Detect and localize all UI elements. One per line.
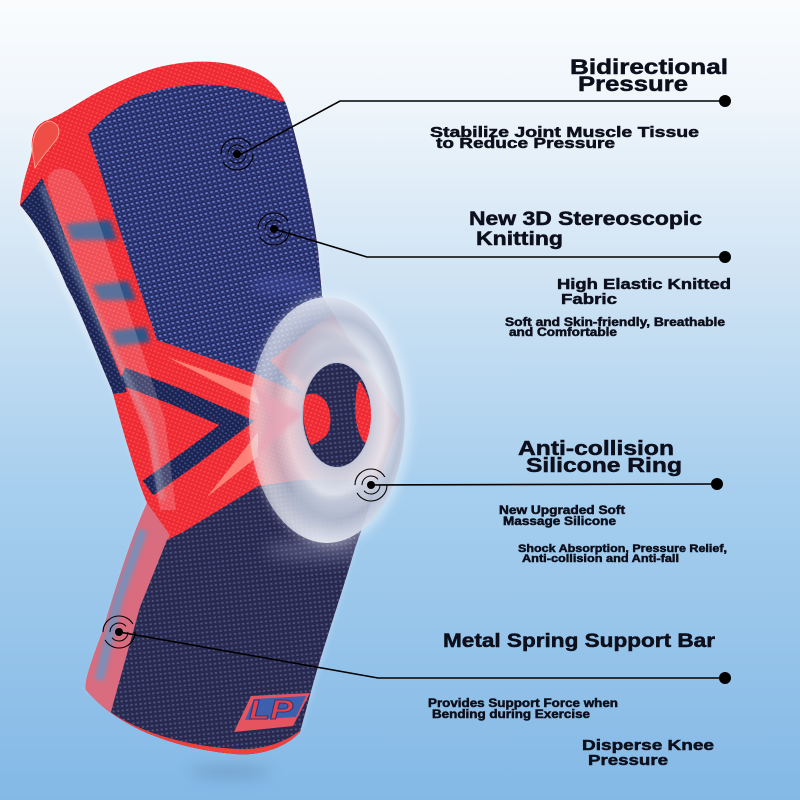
navy chevron in red zone bbox=[122, 376, 237, 488]
heading: Bidirectional Pressure bbox=[570, 55, 728, 96]
knit visible through the hole bbox=[302, 362, 372, 468]
callout line: 3D knitting bbox=[258, 213, 731, 263]
heading: 3D knitting: Knitting bbox=[476, 229, 563, 250]
lower navy knit panel bbox=[111, 480, 378, 754]
red side lobe bbox=[33, 121, 59, 168]
sleeve glow bbox=[20, 62, 355, 732]
pale shading at ring bottom bbox=[265, 540, 385, 560]
heading: silicone ring: Silicone Ring bbox=[526, 454, 682, 477]
text: soft and breathable bbox=[505, 317, 725, 339]
callout line: spring bar bbox=[103, 616, 731, 684]
LP logo badge bbox=[234, 693, 310, 732]
text: disperse knee pressure: Disperse Knee bbox=[582, 737, 714, 754]
heading: Bidirectional Pressure: Bidirectional bbox=[570, 55, 728, 79]
upper navy highlight above ring bbox=[251, 273, 319, 297]
text: stabilize joint bbox=[430, 124, 699, 152]
heading: silicone ring bbox=[518, 437, 682, 477]
text: massage silicone: New Upgraded Soft bbox=[499, 505, 625, 517]
text: support force bbox=[428, 698, 618, 721]
spring bar light edge bbox=[42, 185, 162, 500]
sleeve body bbox=[20, 62, 400, 754]
text: massage silicone: Massage Silicone bbox=[503, 516, 616, 528]
text: support force: Bending during Exercise bbox=[432, 709, 590, 721]
callout line: bidirectional pressure bbox=[221, 95, 731, 170]
text: support force: Provides Support Force when bbox=[428, 698, 618, 710]
text: stabilize joint: Stabilize Joint Muscle Tissue bbox=[430, 124, 699, 141]
text: high elastic: Fabric bbox=[561, 291, 617, 308]
left dark side stripe bbox=[18, 178, 127, 394]
floor shadow under sleeve bbox=[188, 769, 272, 775]
heading: silicone ring: Anti-collision bbox=[518, 437, 674, 460]
text: shock absorption: Shock Absorption, Pressure Relief, bbox=[518, 543, 727, 555]
text: shock absorption: Anti-collision and Anti-fall bbox=[522, 553, 679, 565]
red top band and base bbox=[20, 62, 400, 754]
text: high elastic: High Elastic Knitted bbox=[557, 276, 731, 293]
upper navy knit panel bbox=[88, 84, 332, 360]
ring glow bbox=[251, 294, 411, 546]
text: massage silicone bbox=[499, 505, 625, 528]
lower left strip bbox=[80, 500, 170, 715]
heading: 3D knitting: New 3D Stereoscopic bbox=[469, 209, 703, 230]
side navy cross bands bbox=[66, 220, 150, 346]
lower strip blue line bbox=[99, 530, 143, 680]
navy top of chevron against upper knit bbox=[157, 340, 305, 396]
heading: metal spring: Metal Spring Support Bar bbox=[443, 631, 716, 652]
pale V overlay bbox=[167, 357, 260, 497]
callout line: silicone ring bbox=[355, 469, 723, 501]
heading: 3D knitting bbox=[469, 209, 703, 250]
knee sleeve illustration bbox=[20, 62, 400, 754]
text: soft and breathable: Soft and Skin-friendly, Breathable bbox=[505, 317, 725, 329]
text: disperse knee pressure: Pressure bbox=[588, 752, 668, 769]
text: stabilize joint: to Reduce Pressure bbox=[436, 135, 615, 152]
LP logo badge: LP bbox=[249, 694, 293, 725]
translucent spring bar overlay bbox=[48, 169, 176, 510]
pink chevron tip seen through ring bbox=[252, 386, 303, 458]
heading: Bidirectional Pressure: Pressure bbox=[578, 72, 688, 96]
text: soft and breathable: and Comfortable bbox=[509, 327, 617, 339]
text: disperse knee pressure bbox=[582, 737, 714, 769]
silicone ring bbox=[249, 294, 411, 546]
text: shock absorption bbox=[518, 543, 727, 565]
bottom red hem bbox=[95, 700, 300, 754]
ring inner shade bbox=[286, 331, 372, 382]
ring body bbox=[249, 297, 405, 543]
text: high elastic bbox=[557, 276, 731, 308]
